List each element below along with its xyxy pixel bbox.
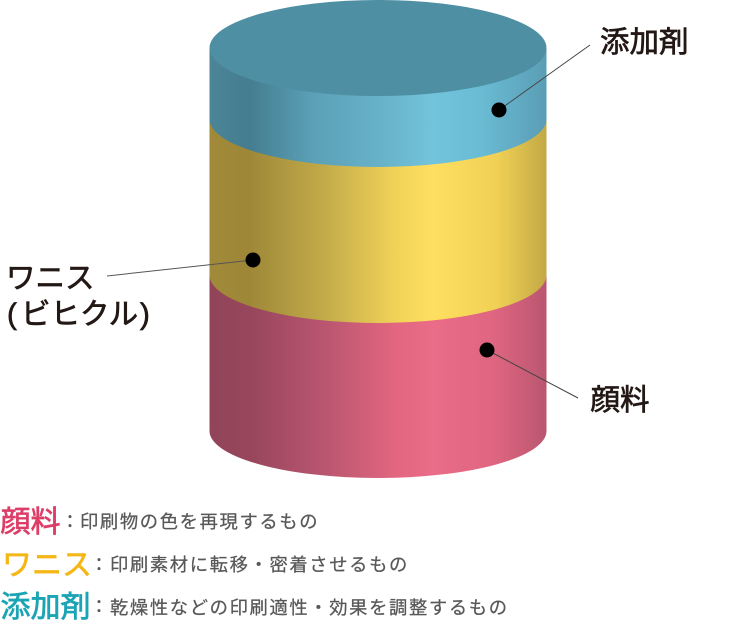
callout: varnish: ワニス	[6, 262, 95, 295]
label: vehicle: ビヒクル	[21, 298, 138, 331]
legend: pigment	[0, 506, 319, 539]
callout: pigment	[480, 342, 650, 417]
layer: pigment	[210, 275, 546, 478]
legend: additive: 添加剤	[0, 591, 90, 624]
legend	[0, 506, 509, 624]
legend: additive	[0, 591, 509, 624]
legend: varnish: ワニス	[2, 549, 92, 582]
callout: pigment: 顔料	[590, 384, 650, 417]
legend: varnish	[2, 549, 409, 582]
layer: additive	[210, 48, 546, 167]
layer: varnish	[210, 119, 546, 323]
callout: additive: 添加剤	[600, 26, 689, 59]
label: vehicle: (	[7, 298, 17, 331]
legend: varnish: 印刷素材に転移・密着させるもの	[110, 554, 409, 575]
cylinder diagram	[210, 0, 546, 478]
label: vehicle: )	[140, 298, 150, 331]
legend: varnish: ：	[90, 555, 108, 575]
cylinder top	[210, 0, 546, 96]
callout: varnish	[6, 252, 260, 331]
legend: pigment: ：	[61, 512, 79, 532]
legend: additive: 乾燥性などの印刷適性・効果を調整するもの	[110, 597, 509, 618]
legend: additive: ：	[90, 597, 108, 617]
legend: pigment: 顔料	[0, 506, 60, 539]
callout: additive	[492, 26, 689, 118]
legend: pigment: 印刷物の色を再現するもの	[80, 511, 319, 532]
